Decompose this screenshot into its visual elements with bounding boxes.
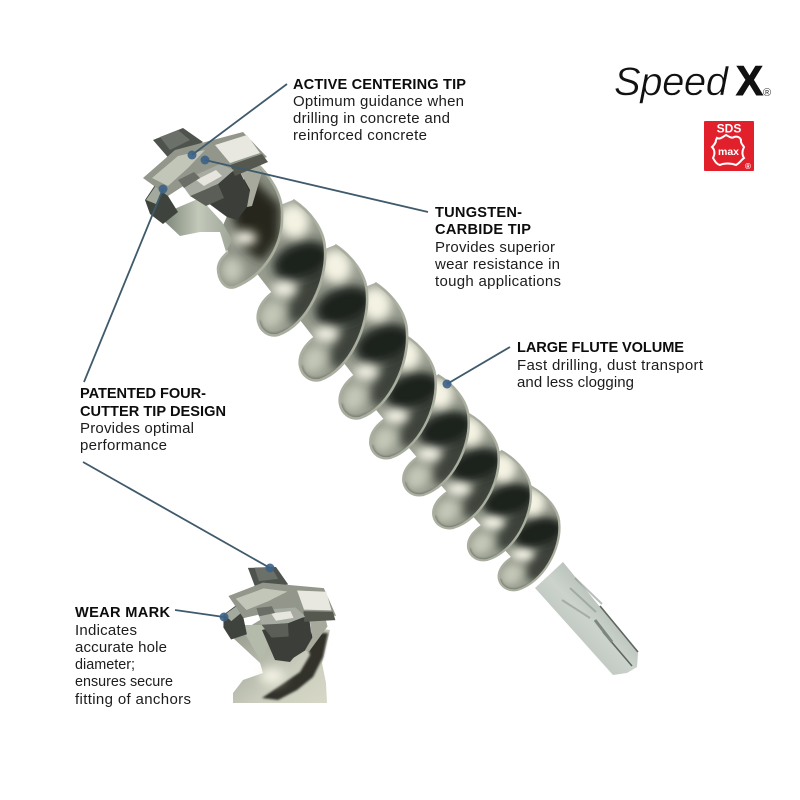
text: active centering tip: reinforced concrete [293,127,427,144]
text: wear mark: accurate hole [75,639,167,656]
text: large flute volume: LARGE FLUTE VOLUME [517,340,684,356]
text: tungsten-carbide tip [434,205,561,290]
text: large flute volume: Fast drilling, dust transport [517,357,704,374]
logo: SDS max red badge: max [718,146,739,158]
text: active centering tip: ACTIVE CENTERING TIP [293,77,466,93]
text: tungsten-carbide tip: Provides superior [435,239,555,256]
flute 5 [356,335,448,458]
text: patented four-cutter tip design: Provides optimal [80,420,194,437]
text: large flute volume [517,340,704,391]
flute 4 [325,283,420,418]
leader: active centering tip [188,84,287,160]
leader: four-cutter tip lower [83,462,274,572]
leader: tungsten-carbide tip [200,156,428,212]
flute 2 [243,200,338,335]
text: active centering tip: drilling in concrete and [293,110,450,127]
text: tungsten-carbide tip: wear resistance in [434,256,560,273]
logo: Speed X wordmark: ® [763,87,771,99]
text: wear mark [75,605,191,708]
logo: SDS max red badge: ® [745,162,751,171]
logo: Speed X wordmark: Speed [614,60,730,104]
logo: Speed X wordmark [614,57,771,104]
flute 1 [218,160,282,288]
text: tungsten-carbide tip: tough applications [435,273,561,290]
text: tungsten-carbide tip: CARBIDE TIP [435,222,531,238]
drill tip detail: lower illustration [223,567,336,703]
leader: large flute volume [442,347,510,388]
leader: wear mark [175,610,228,622]
head lower body [165,198,232,252]
shank [535,562,638,675]
text: wear mark: ensures secure [75,673,173,690]
text: wear mark: WEAR MARK [75,605,170,621]
text: patented four-cutter tip design: CUTTER TIP DESIGN [80,404,226,420]
flute 3 [285,245,380,380]
detail cutter head [215,555,345,671]
text: patented four-cutter tip design: PATENTED FOUR- [80,386,206,402]
text: large flute volume: and less clogging [517,374,634,391]
drill bit: main illustration [143,128,638,675]
text: wear mark: Indicates [75,622,137,639]
text: wear mark: diameter; [75,656,135,673]
cutter head [143,128,268,224]
flute 8 [454,451,543,560]
logo: SDS max red badge [704,121,754,171]
text: active centering tip [293,77,466,144]
text: patented four-cutter tip design: performance [80,437,167,454]
flute 9 [486,486,571,590]
logo: SDS max red badge: SDS [717,122,741,136]
text: patented four-cutter tip design [80,386,226,454]
leader: four-cutter tip upper [84,184,168,382]
detail body [232,620,330,703]
text: wear mark: fitting of anchors [75,691,191,708]
flute 7 [419,413,511,528]
flute 6 [389,375,481,495]
text: active centering tip: Optimum guidance when [293,93,464,110]
text: tungsten-carbide tip: TUNGSTEN- [435,205,522,221]
logo: Speed X wordmark: X [736,57,763,104]
